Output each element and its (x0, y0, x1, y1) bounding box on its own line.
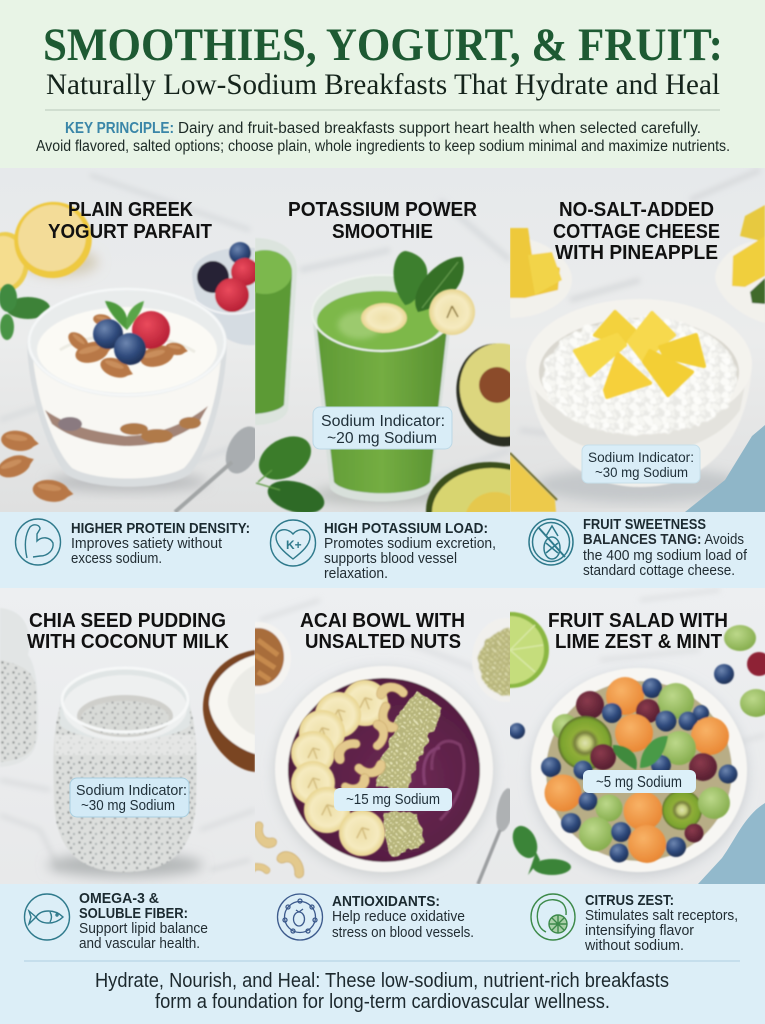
callout: sodium indicator: Sodium Indicator: (588, 450, 694, 465)
icon: blue napkin (698, 803, 765, 884)
icon: banana slice (429, 289, 475, 335)
panel: fruit salad (510, 588, 765, 884)
icon: mint sprig (0, 284, 50, 340)
closing statement: Hydrate, Nourish, and Heal: These low-sodium, nutrient-rich breakfasts (95, 970, 669, 992)
icon: mint sprig (508, 822, 571, 875)
icon: citrus (531, 894, 575, 940)
icon: cashews (330, 679, 409, 794)
panel heading: COTTAGE CHEESE (553, 221, 720, 243)
icon: back smoothie glass (238, 238, 297, 425)
panel heading (27, 610, 230, 653)
feature text: potassium: HIGH POTASSIUM LOAD: (324, 520, 488, 537)
feature text: omega-3: OMEGA-3 & (79, 890, 159, 907)
feature text: antioxidants: ANTIOXIDANTS: (332, 893, 440, 910)
feature text: protein: excess sodium. (71, 550, 162, 567)
closing statement: form a foundation for long-term cardiovascular wellness. (155, 991, 610, 1013)
icon: loose fruit (509, 625, 765, 739)
feature text: omega-3: SOLUBLE FIBER: (79, 905, 188, 922)
icon: spoon (478, 787, 517, 884)
callout: sodium indicator: ~30 mg Sodium (595, 465, 688, 480)
icon: pineapple chunks (575, 312, 704, 397)
panel heading: CHIA SEED PUDDING (29, 610, 226, 632)
feature text: citrus zest: intensifying flavor (585, 922, 694, 939)
panel heading: YOGURT PARFAIT (48, 221, 212, 243)
feature text: protein (71, 520, 250, 567)
icon: back jar (0, 608, 38, 767)
feature text: omega-3: and vascular health. (79, 935, 200, 952)
panel heading: PLAIN GREEK (68, 199, 194, 221)
icon: blue napkin (685, 425, 765, 512)
panel heading: WITH PINEAPPLE (555, 242, 718, 264)
panel heading (553, 199, 720, 264)
title: SMOOTHIES, YOGURT, & FRUIT: (43, 19, 723, 71)
feature text: protein: Improves satiety without (71, 535, 223, 552)
icon: hemp seed dish (472, 618, 540, 702)
feature text: pineapple (583, 516, 748, 579)
panel heading (48, 199, 212, 243)
header block (36, 19, 730, 155)
feature text: omega-3: Support lipid balance (79, 920, 208, 937)
callout: sodium indicator: ~15 mg Sodium (346, 792, 440, 808)
panel heading: SMOOTHIE (332, 221, 433, 243)
icon: banana slices (291, 680, 388, 856)
feature text: potassium: supports blood vessel (324, 550, 457, 567)
feature text: citrus zest: CITRUS ZEST: (585, 892, 674, 909)
callout: sodium indicator: ~20 mg Sodium (327, 430, 437, 447)
icon: crossed pineapple (529, 519, 573, 565)
feature text: citrus zest (584, 892, 738, 954)
feature text: pineapple: the 400 mg sodium load of (583, 547, 748, 564)
icon: fruit bowl (531, 668, 747, 876)
icon: berry bowl (192, 242, 259, 345)
icon: hemp seeds (375, 690, 440, 856)
panel heading: WITH COCONUT MILK (27, 631, 230, 653)
panel: no-salt-added cottage cheese (510, 168, 765, 512)
icon: spoon (175, 421, 267, 512)
icon: cottage cheese bowl (526, 299, 752, 503)
icon: lime half (473, 612, 549, 688)
callout: sodium indicator: ~5 mg Sodium (596, 774, 682, 791)
closing statement (95, 970, 669, 1013)
icon: pineapple wedge (510, 453, 557, 512)
panel heading (548, 610, 728, 653)
icon: antioxidant ring (278, 894, 322, 940)
icon: spinach garnish (394, 251, 464, 312)
panel heading (288, 199, 478, 243)
panel heading: POTASSIUM POWER (288, 199, 478, 221)
feature text: pineapple: standard cottage cheese. (583, 562, 735, 579)
callout: sodium indicator: ~30 mg Sodium (81, 798, 175, 814)
icon: nut dish (225, 622, 291, 694)
panel heading: NO-SALT-ADDED (559, 199, 714, 221)
subtitle: Naturally Low-Sodium Breakfasts That Hydrate and Heal (46, 68, 720, 101)
icon: potassium heart: K+ (286, 538, 302, 552)
feature text: pineapple: FRUIT SWEETNESS (583, 516, 706, 533)
feature text: potassium: Promotes sodium excretion, (324, 535, 496, 552)
key principle text: Dairy and fruit-based breakfasts support heart health when selected carefully. (178, 120, 701, 137)
icon: loose cashews (245, 818, 308, 883)
panel heading (300, 610, 465, 653)
callout: sodium indicator: Sodium Indicator: (76, 783, 187, 799)
feature text: potassium: relaxation. (324, 565, 388, 582)
feature text: potassium (324, 520, 496, 582)
icon: parfait toppings (65, 301, 189, 383)
icon: chia jar (47, 667, 203, 877)
icon: fish (24, 894, 70, 940)
callout: sodium indicator (582, 445, 700, 483)
icon: potassium heart (270, 520, 316, 566)
icon: parfait glass (27, 287, 227, 492)
icon: acai bowl (274, 666, 494, 876)
feature text: pineapple: BALANCES TANG: Avoids (583, 531, 744, 548)
icon: pineapple plate (715, 205, 765, 323)
feature text: protein: HIGHER PROTEIN DENSITY: (71, 520, 250, 537)
key principle text: KEY PRINCIPLE: (65, 120, 174, 137)
callout: sodium indicator: Sodium Indicator: (321, 413, 445, 430)
panel heading: FRUIT SALAD WITH (548, 610, 728, 632)
feature text: citrus zest: Stimulates salt receptors, (585, 907, 738, 924)
icon: spinach leaves (251, 428, 328, 519)
icon: main smoothie glass (312, 275, 452, 505)
feature text: citrus zest: without sodium. (584, 937, 684, 954)
key principle text (36, 120, 730, 155)
icon: side pineapple bowl (510, 228, 572, 318)
panel: chia seed pudding (0, 588, 255, 884)
info band: top row (0, 512, 765, 588)
feature text: antioxidants: Help reduce oxidative (332, 908, 465, 925)
panel: acai bowl (255, 588, 510, 884)
icon: avocado half bottom (426, 462, 554, 558)
panel heading: UNSALTED NUTS (305, 631, 461, 653)
panel: plain greek yogurt parfait (0, 168, 255, 512)
panel heading: LIME ZEST & MINT (555, 631, 722, 653)
callout: sodium indicator (70, 778, 189, 817)
feature text: antioxidants: stress on blood vessels. (332, 924, 474, 941)
feature text: antioxidants (332, 893, 474, 941)
icon: coconut half (203, 650, 255, 772)
icon: lemons (0, 189, 104, 292)
panel heading: ACAI BOWL WITH (300, 610, 465, 632)
callout: sodium indicator (583, 770, 696, 793)
icon: fruit salad (541, 677, 738, 863)
feature text: omega-3 (79, 890, 208, 952)
icon: avocado half (445, 334, 555, 456)
info band: bottom row (0, 884, 765, 1024)
callout: sodium indicator (334, 788, 452, 811)
icon: loose almonds (0, 429, 75, 505)
callout: sodium indicator (313, 407, 452, 449)
icon: flexed arm (16, 519, 60, 565)
panel: potassium power smoothie (255, 168, 510, 512)
